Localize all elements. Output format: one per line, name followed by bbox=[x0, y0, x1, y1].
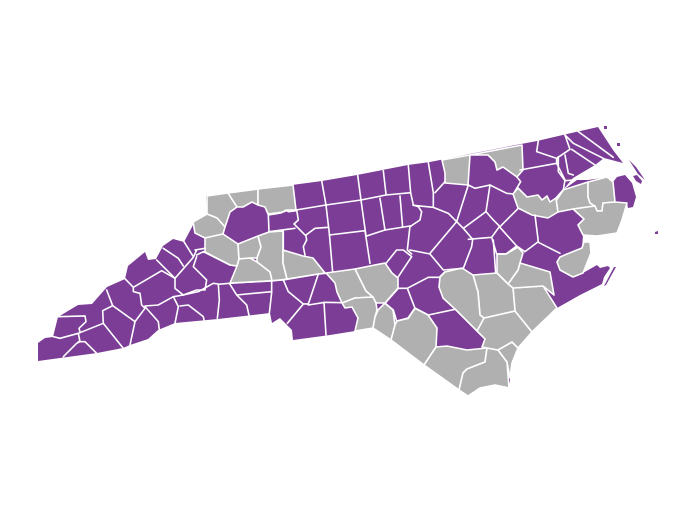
outer banks slivers bbox=[604, 126, 658, 286]
county borders: northeast bbox=[410, 132, 613, 270]
state silhouette in purple bbox=[38, 127, 636, 396]
county borders: west bbox=[53, 242, 237, 357]
county borders: south central bbox=[385, 240, 496, 321]
gray counties bbox=[193, 145, 627, 396]
county borders: central bbox=[217, 165, 422, 335]
